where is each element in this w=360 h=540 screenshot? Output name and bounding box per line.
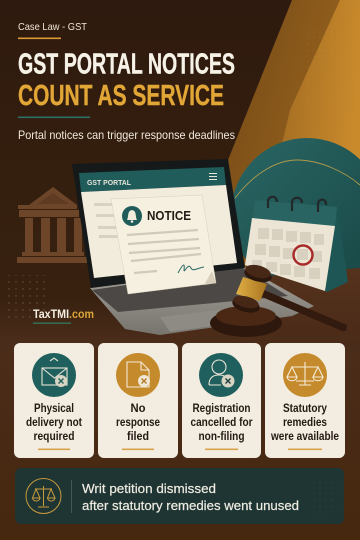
notice card <box>111 195 216 294</box>
icon: user <box>199 353 243 397</box>
card: no response: No <box>130 401 146 415</box>
handle <box>262 290 347 331</box>
card: registration cancelled <box>182 343 261 458</box>
teal circle behind calendar <box>231 138 360 290</box>
card: physical delivery <box>14 343 94 458</box>
table <box>170 268 360 345</box>
banner text <box>82 481 299 513</box>
portal label: GST PORTAL <box>87 178 131 187</box>
card: statutory remedies: Statutory <box>283 401 327 415</box>
notice card: NOTICE <box>147 208 191 223</box>
banner text: Writ petition dismissed <box>82 481 216 496</box>
icon: scales <box>283 353 327 397</box>
card: statutory remedies: were available <box>270 429 339 443</box>
card: physical delivery: required <box>34 429 74 443</box>
subtitle: Portal notices can trigger response deadlines <box>18 128 235 142</box>
icon: bell <box>122 206 142 226</box>
icon: document <box>116 353 160 397</box>
card: registration cancelled: non-filing <box>198 429 244 443</box>
card: registration cancelled: cancelled for <box>190 415 253 429</box>
laptop <box>72 159 314 335</box>
card: statutory remedies: remedies <box>283 415 327 429</box>
menu icon <box>209 173 217 180</box>
laptop screen <box>72 159 245 288</box>
banner <box>15 468 344 524</box>
title <box>18 48 235 118</box>
icon: courthouse <box>17 187 87 263</box>
sound block <box>210 309 282 337</box>
header: kicker <box>18 21 88 39</box>
calendar <box>245 197 348 292</box>
logo: TaxTMI.com <box>33 307 94 321</box>
screen lines <box>94 203 124 238</box>
title: GST PORTAL NOTICES <box>18 48 235 80</box>
icon: scales outline <box>26 478 61 514</box>
head <box>236 277 267 301</box>
title: COUNT AS SERVICE <box>18 80 224 112</box>
card: physical delivery: Physical <box>34 401 74 415</box>
signature <box>178 265 204 273</box>
decorative dots <box>8 275 46 319</box>
laptop base <box>90 266 314 335</box>
card: no response <box>98 343 178 458</box>
banner text: after statutory remedies went unused <box>82 498 299 513</box>
card: no response: filed <box>127 429 149 443</box>
card: no response: response <box>116 415 160 429</box>
date circle <box>294 246 312 264</box>
icon: envelope <box>32 353 76 397</box>
card: physical delivery: delivery not <box>26 415 82 429</box>
gavel <box>210 263 347 337</box>
card: statutory remedies <box>265 343 345 458</box>
rings <box>268 197 326 212</box>
header: kicker: Case Law - GST <box>18 21 88 33</box>
card: registration cancelled: Registration <box>192 401 250 415</box>
